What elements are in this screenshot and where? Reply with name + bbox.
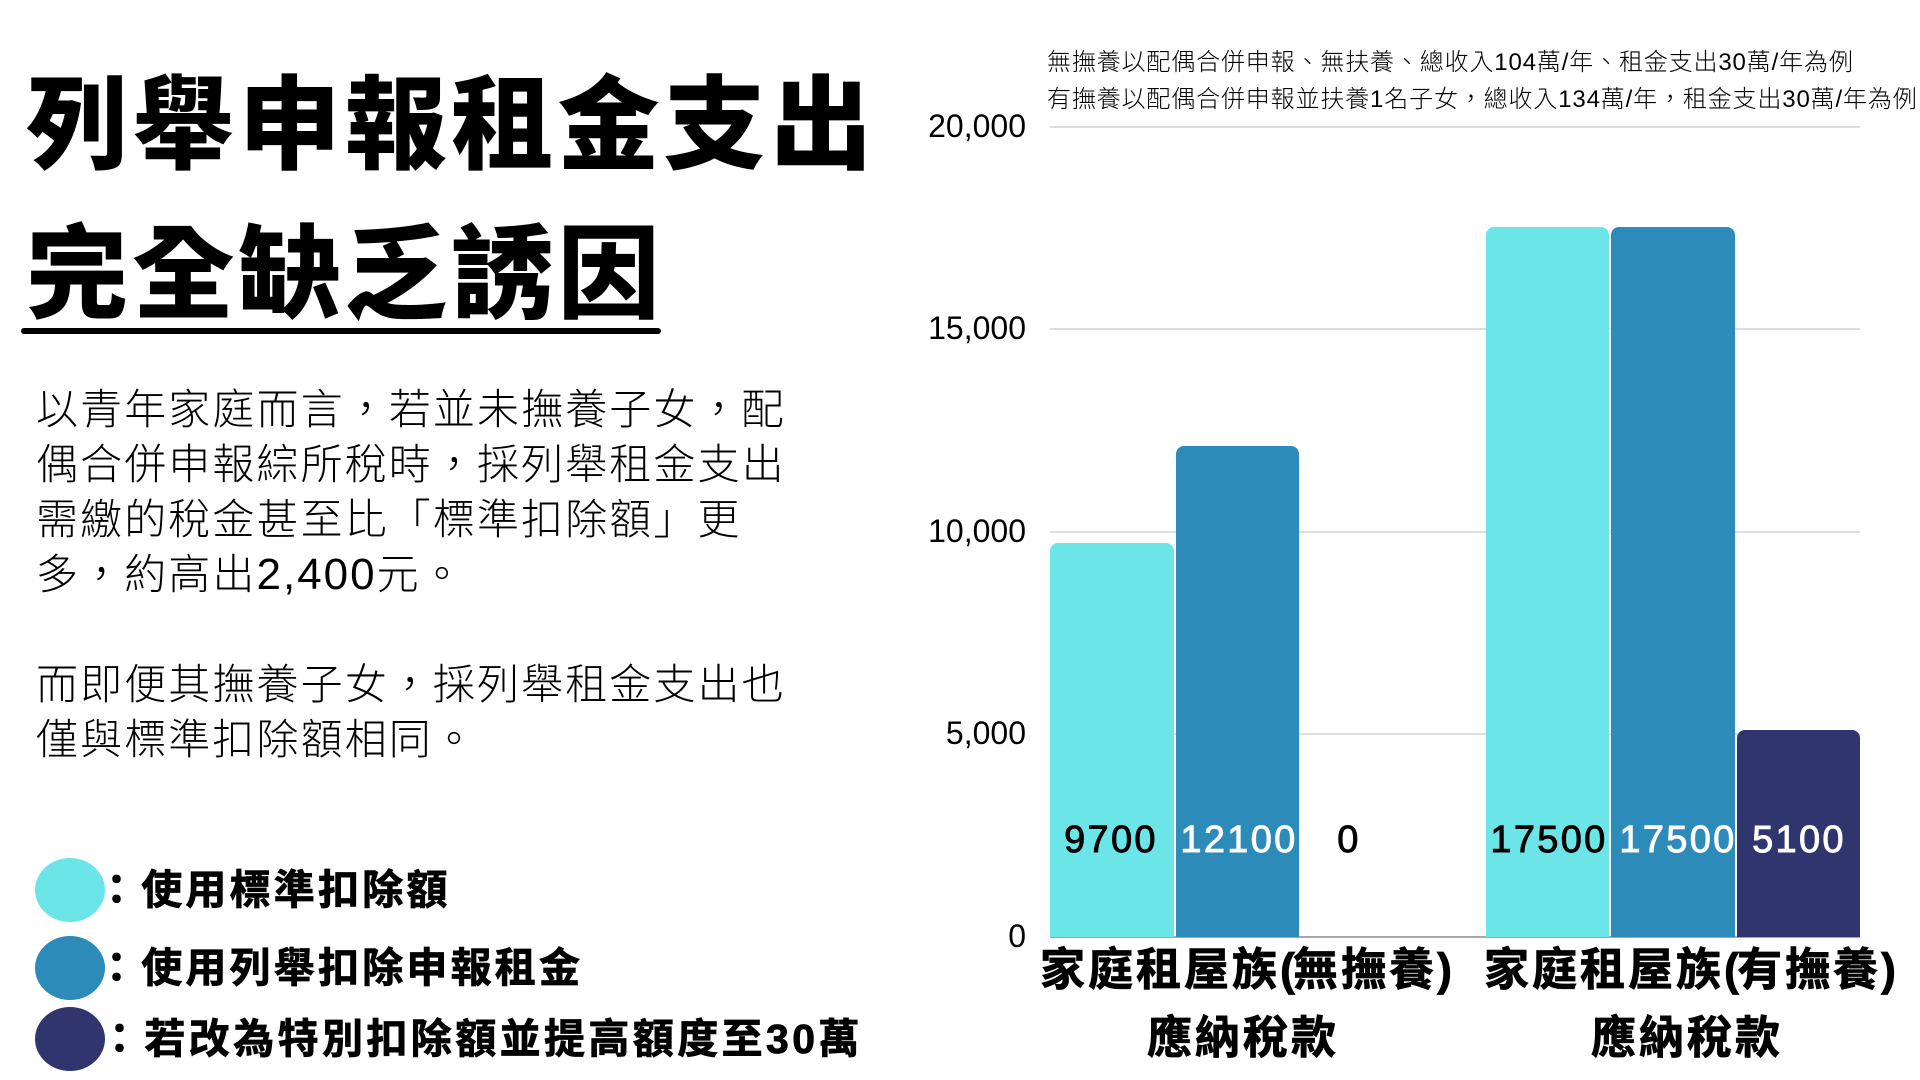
legend label: special deduction: ：若改為特別扣除額並提高額度至30萬: [99, 1016, 863, 1062]
text block: paragraph 2: [36, 661, 786, 763]
y axis labels: 15,000: [928, 310, 1026, 346]
bar: no dependents, standard 9700: [1050, 543, 1174, 937]
text block: paragraph 1: 偶合併申報綜所稅時，採列舉租金支出: [36, 441, 786, 488]
text block: paragraph 1: 多，約高出2,400元。: [36, 550, 465, 599]
category label: with dependents: 應納稅款: [1591, 1012, 1783, 1063]
category label: no dependents: 家庭租屋族(無撫養): [1040, 944, 1450, 995]
data labels: [1064, 819, 1846, 861]
legend icon: cyan: [35, 858, 105, 922]
y axis labels: 0: [1008, 918, 1026, 954]
text block: paragraph 1: 以青年家庭而言，若並未撫養子女，配: [36, 386, 786, 433]
data labels: 9700: [1064, 819, 1158, 861]
legend: [35, 858, 863, 1071]
chart notes: 無撫養以配偶合併申報、無扶養、總收入104萬/年、租金支出30萬/年為例: [1047, 49, 1854, 76]
category label: with dependents: [1484, 944, 1894, 1063]
bar chart: 5100: [1752, 819, 1846, 861]
data labels: 17500: [1619, 819, 1737, 861]
title underline: [21, 328, 661, 334]
title line 1: 列舉申報租金支出: [26, 44, 876, 191]
chart notes: [1047, 49, 1918, 113]
data labels: 12100: [1180, 819, 1298, 861]
data labels: 17500: [1490, 819, 1608, 861]
chart notes: 有撫養以配偶合併申報並扶養1名子女，總收入134萬/年，租金支出30萬/年為例: [1047, 86, 1918, 113]
legend icon: navy: [35, 1007, 105, 1071]
bar: no dependents, itemized 12100: [1176, 446, 1299, 937]
category label: with dependents: 家庭租屋族(有撫養): [1484, 944, 1894, 995]
legend label: itemized rent: ：使用列舉扣除申報租金: [96, 945, 583, 991]
category label: no dependents: 應納稅款: [1147, 1012, 1339, 1063]
bar: with dependents, special 5100: [1737, 730, 1860, 937]
text block: paragraph 1: 需繳的稅金甚至比「標準扣除額」更: [36, 496, 742, 543]
y axis labels: 10,000: [928, 513, 1026, 549]
bar: with dependents, itemized 17500: [1611, 227, 1735, 937]
legend label: standard deduction: ：使用標準扣除額: [96, 867, 451, 913]
y axis labels: 5,000: [946, 715, 1026, 751]
title line 2 with underline: 完全缺乏誘因: [26, 193, 664, 340]
title: [21, 44, 876, 340]
legend icon: blue: [35, 936, 105, 1000]
text block: paragraph 1: [36, 386, 786, 599]
y axis labels: 20,000: [928, 108, 1026, 144]
text block: paragraph 2: 而即便其撫養子女，採列舉租金支出也: [36, 661, 786, 708]
category label: no dependents: [1040, 944, 1450, 1063]
y axis labels: [928, 108, 1026, 954]
bar: with dependents, standard 17500: [1486, 227, 1609, 937]
bar chart: [928, 108, 1894, 1063]
text block: paragraph 2: 僅與標準扣除額相同。: [36, 716, 477, 763]
data labels: 0: [1337, 819, 1361, 861]
